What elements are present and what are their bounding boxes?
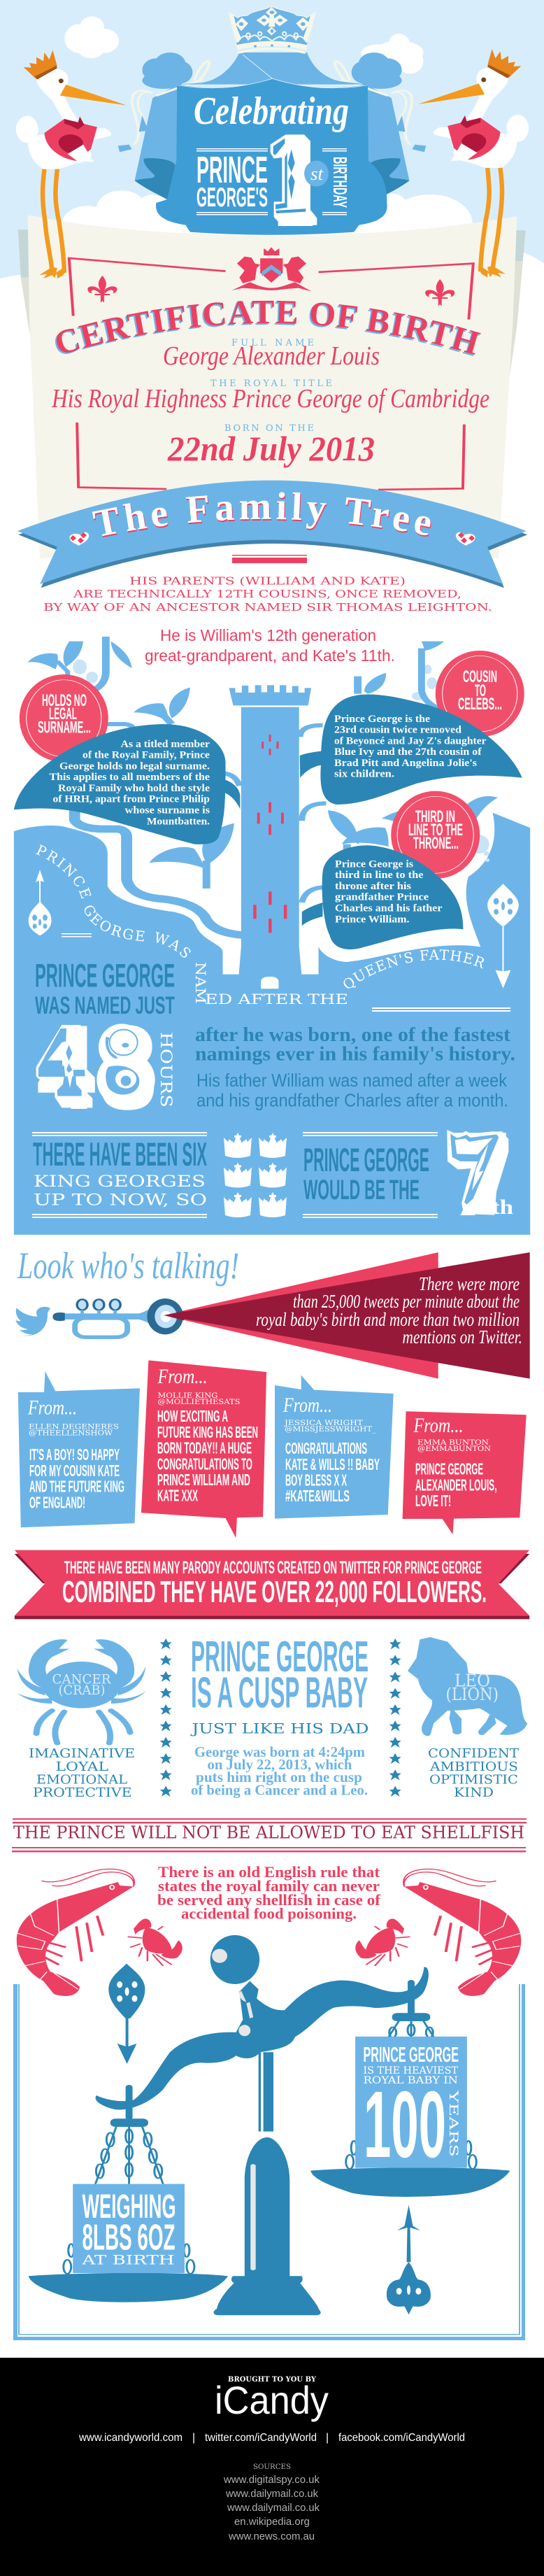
callout: third in line: third in line to the xyxy=(335,870,424,881)
icon: Twitter bird xyxy=(14,1307,50,1336)
callout: third in line: throne after his xyxy=(335,881,411,892)
speech bubble: Jessica Wright: JESSICA WRIGHT xyxy=(284,1420,363,1427)
rules: six kings xyxy=(32,1132,438,1218)
icon: coat of arms xyxy=(231,247,312,292)
tent text: Prince George's: PRINCE xyxy=(196,149,268,191)
text: Leo traits: CONFIDENT xyxy=(428,1746,519,1761)
parents text: BY WAY OF AN ANCESTOR NAMED SIR THOMAS LEIGHTON. xyxy=(43,601,492,614)
footer: links xyxy=(78,2432,465,2444)
text: birth time: puts him right on the cusp xyxy=(196,1769,362,1785)
certificate heading: CERTIFICATE OF BIRTH xyxy=(55,302,480,357)
speech bubble: Ellen DeGeneres xyxy=(18,1371,140,1527)
icon: left ornament arrow xyxy=(29,870,52,935)
badge: st xyxy=(304,161,329,186)
callout: third in line: THIRD IN xyxy=(415,807,455,826)
callout: cousin to celebs: COUSIN xyxy=(463,667,497,686)
speech bubble: Jessica Wright: BOY BLESS X X xyxy=(285,1471,347,1489)
paper certificate sheet xyxy=(18,215,526,558)
weight tag: heaviest in 100 years: YEARS xyxy=(446,2089,460,2157)
text: Leo traits: OPTIMISTIC xyxy=(429,1773,518,1787)
tree branches and leaves xyxy=(28,637,498,935)
speech bubble: Jessica Wright xyxy=(275,1375,394,1519)
text: father and grandfather: and his grandfather Charles after a month. xyxy=(196,1090,508,1111)
footer: sources: SOURCES xyxy=(253,2463,291,2471)
icon: Leo lion: (LION) xyxy=(446,1685,499,1704)
icon: right ornament arrow xyxy=(487,884,519,989)
callout: holds no legal surname: George holds no legal surname. xyxy=(59,761,210,772)
weight tag: heaviest in 100 years: 100 xyxy=(364,2072,446,2177)
red divider bars xyxy=(232,555,307,563)
text: old English rule xyxy=(157,1863,381,1923)
callout: cousin to celebs: TO xyxy=(475,681,486,700)
tent text: Celebrating: Celebrating xyxy=(194,90,349,133)
callout: third in line: Prince William. xyxy=(335,914,410,925)
big numeral one: 1 xyxy=(271,105,317,256)
big number: 7th: th xyxy=(492,1196,513,1219)
text: old English rule: There is an old English rule that xyxy=(158,1863,380,1881)
callout: cousin to celebs: Prince George is the xyxy=(334,714,430,725)
weight tag: 8lbs 6oz: WEIGHING xyxy=(83,2188,176,2225)
big number: 7th: 7 xyxy=(448,1103,509,1243)
tent text: Birthday vertical: BIRTHDAY xyxy=(329,157,351,208)
weight tag: 8lbs 6oz xyxy=(73,2184,185,2273)
generation text xyxy=(145,626,395,665)
sky with clouds and hill xyxy=(0,0,544,443)
speech bubble: Mollie King: KATE XXX xyxy=(157,1486,198,1504)
curved text: Prince George was named after the Queen's father xyxy=(36,844,484,1007)
heading: Prince George is a cusp baby xyxy=(191,1633,368,1717)
callout: cousin to celebs: Brad Pitt and Angelina Jolie's xyxy=(334,758,477,769)
icon: lower ornament arrow xyxy=(387,2205,431,2314)
speech bubble: Jessica Wright: CONGRATULATIONS xyxy=(285,1439,367,1457)
icon: hanging tent with crown: THERE HAVE BEEN SIX xyxy=(33,1135,207,1173)
icon: left stork xyxy=(16,50,127,278)
icon: Cancer crab: (CRAB) xyxy=(59,1683,105,1698)
sound cone with tweet statistic: There were more xyxy=(419,1273,520,1294)
speech bubble: Mollie King: PRINCE WILLIAM AND xyxy=(157,1471,250,1489)
footer: links: twitter.com/iCandyWorld xyxy=(205,2432,317,2444)
callout: holds no legal surname: This applies to all members of the xyxy=(49,772,210,783)
callout: holds no legal surname: HOLDS NO xyxy=(42,691,87,710)
callout: holds no legal surname: LEGAL xyxy=(49,705,77,723)
heading: Prince George was named just: WAS NAMED JUST xyxy=(35,992,175,1019)
speech bubble: Ellen DeGeneres: @THEELLENSHOW xyxy=(29,1430,113,1437)
text: Cancer traits xyxy=(29,1746,135,1800)
banner: parody accounts xyxy=(15,1550,529,1619)
icon: Cancer crab: CANCER xyxy=(52,1672,111,1687)
icon: left prawn xyxy=(17,1869,134,1996)
callout: cousin to celebs: CELEBS... xyxy=(458,695,502,714)
footer: brought to you by: BROUGHT TO YOU BY xyxy=(228,2376,317,2384)
weight tag: heaviest in 100 years: PRINCE GEORGE xyxy=(364,2042,459,2067)
parents text: ARE TECHNICALLY 12TH COUSINS, ONCE REMOVED, xyxy=(73,588,461,600)
generation text: great-grandparent, and Kate's 11th. xyxy=(145,646,395,665)
speech bubble: Mollie King: FUTURE KING HAS BEEN xyxy=(157,1423,258,1441)
callout: cousin to celebs: 23rd cousin twice removed xyxy=(334,725,462,736)
badge: st: st xyxy=(310,164,324,184)
footer: sources: www.dailymail.co.uk xyxy=(225,2488,318,2500)
callout: cousin to celebs: Blue Ivy and the 27th cousin of xyxy=(334,746,482,758)
callout: holds no legal surname: of the Royal Family, Prince xyxy=(83,750,210,761)
callout: third in line: grandfather Prince xyxy=(335,891,429,903)
callout: third in line: THRONE... xyxy=(413,834,459,853)
speech bubble: Mollie King xyxy=(141,1360,266,1538)
callout: third in line: Prince George is xyxy=(335,859,413,870)
speech bubble: Ellen DeGeneres: AND THE FUTURE KING xyxy=(29,1478,124,1496)
text: after he was born xyxy=(195,1024,515,1065)
speech bubble: Ellen DeGeneres: IT'S A BOY! SO HAPPY xyxy=(29,1445,120,1464)
footer: sources: www.digitalspy.co.uk xyxy=(223,2474,320,2486)
footer: links: facebook.com/iCandyWorld xyxy=(338,2432,465,2444)
speech bubble: Emma Bunton: EMMA BUNTON xyxy=(417,1439,489,1447)
speech bubble: Mollie King: CONGRATULATIONS TO xyxy=(157,1455,252,1473)
speech bubble: Ellen DeGeneres: FOR MY COUSIN KATE xyxy=(29,1462,120,1480)
heading: Prince George is a cusp baby: IS A CUSP BABY xyxy=(191,1669,368,1717)
callout: third in line xyxy=(322,791,480,949)
text: father and grandfather: His father William was named after a week xyxy=(196,1070,508,1091)
footer: iCandy logo: iCandy xyxy=(215,2378,329,2422)
text: old English rule: accidental food poisoning. xyxy=(181,1904,357,1923)
callout: holds no legal surname xyxy=(14,674,226,844)
speech bubble: Emma Bunton xyxy=(403,1411,527,1534)
speech bubble: Jessica Wright: From... xyxy=(282,1394,332,1417)
weight tag: heaviest in 100 years: IS THE HEAVIEST xyxy=(364,2065,459,2076)
icon: Leo lion: LEO xyxy=(454,1671,490,1690)
weight tag: heaviest in 100 years: ROYAL BABY IN xyxy=(364,2075,458,2086)
banner: shellfish heading: THE PRINCE WILL NOT BE ALLOWED TO EAT SHELLFISH xyxy=(13,1823,524,1843)
callout: holds no legal surname: whose surname is xyxy=(124,805,210,816)
icon: left small crab xyxy=(128,1918,182,1966)
curved text: Prince George was named after the Queen's father: NAM xyxy=(192,962,209,1004)
speech bubble: Emma Bunton: From... xyxy=(413,1414,463,1437)
certificate: royal title: THE ROYAL TITLE xyxy=(210,378,332,389)
parents text xyxy=(43,575,492,614)
callout: third in line: Charles and his father xyxy=(335,903,443,914)
icon: right small crab xyxy=(355,1918,410,1966)
certificate frame with fleur-de-lis xyxy=(69,258,473,490)
sound cone with tweet statistic xyxy=(163,1252,530,1379)
parents text: HIS PARENTS (WILLIAM AND KATE) xyxy=(129,575,406,588)
text: Cancer traits: PROTECTIVE xyxy=(33,1785,131,1800)
footer: sources: www.news.com.au xyxy=(228,2531,315,2542)
text: birth time: George was born at 4:24pm xyxy=(194,1743,365,1760)
border frame around scale xyxy=(13,1984,525,2340)
icon: balance scale xyxy=(29,1935,510,2315)
curved text: Prince George was named after the Queen's father: PRINCE GEORGE WAS xyxy=(36,844,191,958)
text: there have been six King Georges: UP TO NOW, SO xyxy=(34,1192,207,1209)
icon: castle tower xyxy=(229,685,311,989)
weight tag: 8lbs 6oz: AT BIRTH xyxy=(81,2253,174,2268)
heading: Prince George was named just: PRINCE GEORGE xyxy=(35,957,175,993)
big number: 48 hours: HOURS xyxy=(157,1032,174,1107)
speech bubble: Mollie King: @MOLLIETHESATS xyxy=(158,1399,241,1406)
tent text: Prince George's: GEORGE'S xyxy=(196,183,268,213)
icon: Cancer crab xyxy=(17,1639,146,1743)
speech bubble: Mollie King: BORN TODAY!! A HUGE xyxy=(157,1438,252,1457)
icon: right prawn xyxy=(403,1869,521,1996)
icon: trumpet xyxy=(52,1298,184,1337)
text: Leo traits xyxy=(428,1746,519,1800)
text: old English rule: be served any shellfish in case of xyxy=(157,1891,381,1909)
text: Cancer traits: LOYAL xyxy=(56,1760,108,1774)
text: Cancer traits: IMAGINATIVE xyxy=(29,1746,135,1761)
heading: Look who's talking: Look who's talking! xyxy=(17,1245,239,1287)
double rules in tree panel xyxy=(62,933,510,1012)
icon: Leo lion xyxy=(408,1637,527,1736)
footer: links: www.icandyworld.com xyxy=(78,2432,182,2444)
text: birth time xyxy=(191,1743,368,1798)
panel: family tree background xyxy=(14,813,530,1235)
callout: cousin to celebs: six children. xyxy=(334,768,394,779)
footer: links: | xyxy=(326,2432,329,2444)
certificate: birth date: 22nd July 2013 xyxy=(167,429,375,468)
text: Prince George would be the: WOULD BE THE xyxy=(303,1175,420,1205)
icon: crown on tent xyxy=(229,6,315,54)
footer: sources xyxy=(223,2463,320,2542)
text: Leo traits: KIND xyxy=(454,1785,494,1800)
speech bubble: Jessica Wright: KATE & WILLS !! BABY xyxy=(285,1455,380,1473)
star columns xyxy=(160,1639,401,1797)
callout: cousin to celebs: of Beyoncé and Jay Z's daughter xyxy=(334,736,487,747)
text: old English rule: states the royal family can never xyxy=(158,1877,380,1895)
speech bubble: Jessica Wright: @MISSJESSWRIGHT_ xyxy=(285,1426,376,1434)
footer: sources: en.wikipedia.org xyxy=(234,2516,310,2528)
icon: upper ornament arrow xyxy=(108,1964,145,2064)
text: father and grandfather xyxy=(196,1070,508,1111)
curved text: Prince George was named after the Queen's father: QUEEN'S FATHER xyxy=(344,949,484,989)
icon: six crowns xyxy=(224,1133,287,1217)
text: there have been six King Georges xyxy=(33,1135,207,1209)
weight tag: 8lbs 6oz: 8LBS 6OZ xyxy=(83,2218,175,2258)
ribbon: The Family Tree: The Family Tree xyxy=(94,494,431,537)
generation text: He is William's 12th generation xyxy=(160,626,376,644)
callout: holds no legal surname: Mountbatten. xyxy=(147,816,210,827)
subheading: just like his dad: JUST LIKE HIS DAD xyxy=(190,1720,369,1736)
footer: sources: www.dailymail.co.uk xyxy=(227,2502,320,2514)
panel: footer xyxy=(0,2358,544,2576)
callout: holds no legal surname: As a titled member xyxy=(121,739,210,750)
curved text: Prince George was named after the Queen's father: ED AFTER THE xyxy=(205,991,348,1007)
text: after he was born: after he was born, one of the fastest xyxy=(195,1024,511,1046)
text: Prince George would be the xyxy=(303,1141,429,1205)
speech bubble: Ellen DeGeneres: ELLEN DEGENERES xyxy=(29,1423,119,1431)
icon: right stork xyxy=(418,49,529,278)
footer: links: | xyxy=(192,2432,195,2444)
callout: third in line: LINE TO THE xyxy=(408,821,463,840)
speech bubble: Mollie King: From... xyxy=(157,1365,207,1388)
text: birth time: on July 22, 2013, which xyxy=(207,1756,352,1773)
speech bubble: Jessica Wright: #KATE&WILLS xyxy=(285,1487,350,1505)
text: birth time: of being a Cancer and a Leo. xyxy=(191,1781,368,1798)
callout: holds no legal surname: SURNAME... xyxy=(38,718,91,737)
certificate heading: CERTIFICATE OF BIRTH xyxy=(56,301,481,355)
text: Leo traits: AMBITIOUS xyxy=(429,1760,518,1774)
callout: holds no legal surname: of HRH, apart from Prince Philip xyxy=(53,793,210,805)
big number: 48 hours: 48 xyxy=(36,997,158,1136)
speech bubble: Ellen DeGeneres: OF ENGLAND! xyxy=(29,1493,85,1511)
tent text: Prince George's xyxy=(196,148,347,215)
text: Cancer traits: EMOTIONAL xyxy=(36,1773,127,1787)
weight tag: heaviest in 100 years xyxy=(355,2037,467,2177)
callout: cousin to celebs xyxy=(320,651,524,805)
speech bubble: Emma Bunton: @EMMABUNTON xyxy=(417,1445,491,1453)
ribbon: The Family Tree: The Family Tree xyxy=(92,492,431,536)
ribbon: The Family Tree xyxy=(17,480,527,588)
certificate: full name: George Alexander Louis xyxy=(163,341,380,371)
speech bubble: Ellen DeGeneres: From... xyxy=(27,1396,77,1419)
speech bubble: Mollie King: HOW EXCITING A xyxy=(157,1407,228,1425)
certificate: full name: FULL NAME xyxy=(231,338,314,348)
speech bubble: Mollie King: MOLLIE KING xyxy=(158,1392,218,1400)
big numeral one xyxy=(271,105,317,256)
heading: Prince George was named just xyxy=(35,957,175,1019)
text: there have been six King Georges: KING GEORGES xyxy=(34,1173,206,1191)
certificate: birth date: BORN ON THE xyxy=(224,423,314,434)
text: after he was born: namings ever in his family's history. xyxy=(195,1044,515,1065)
callout: holds no legal surname: Royal Family who hold the style xyxy=(58,783,210,794)
speech bubble: Emma Bunton: LOVE IT! xyxy=(415,1492,451,1510)
